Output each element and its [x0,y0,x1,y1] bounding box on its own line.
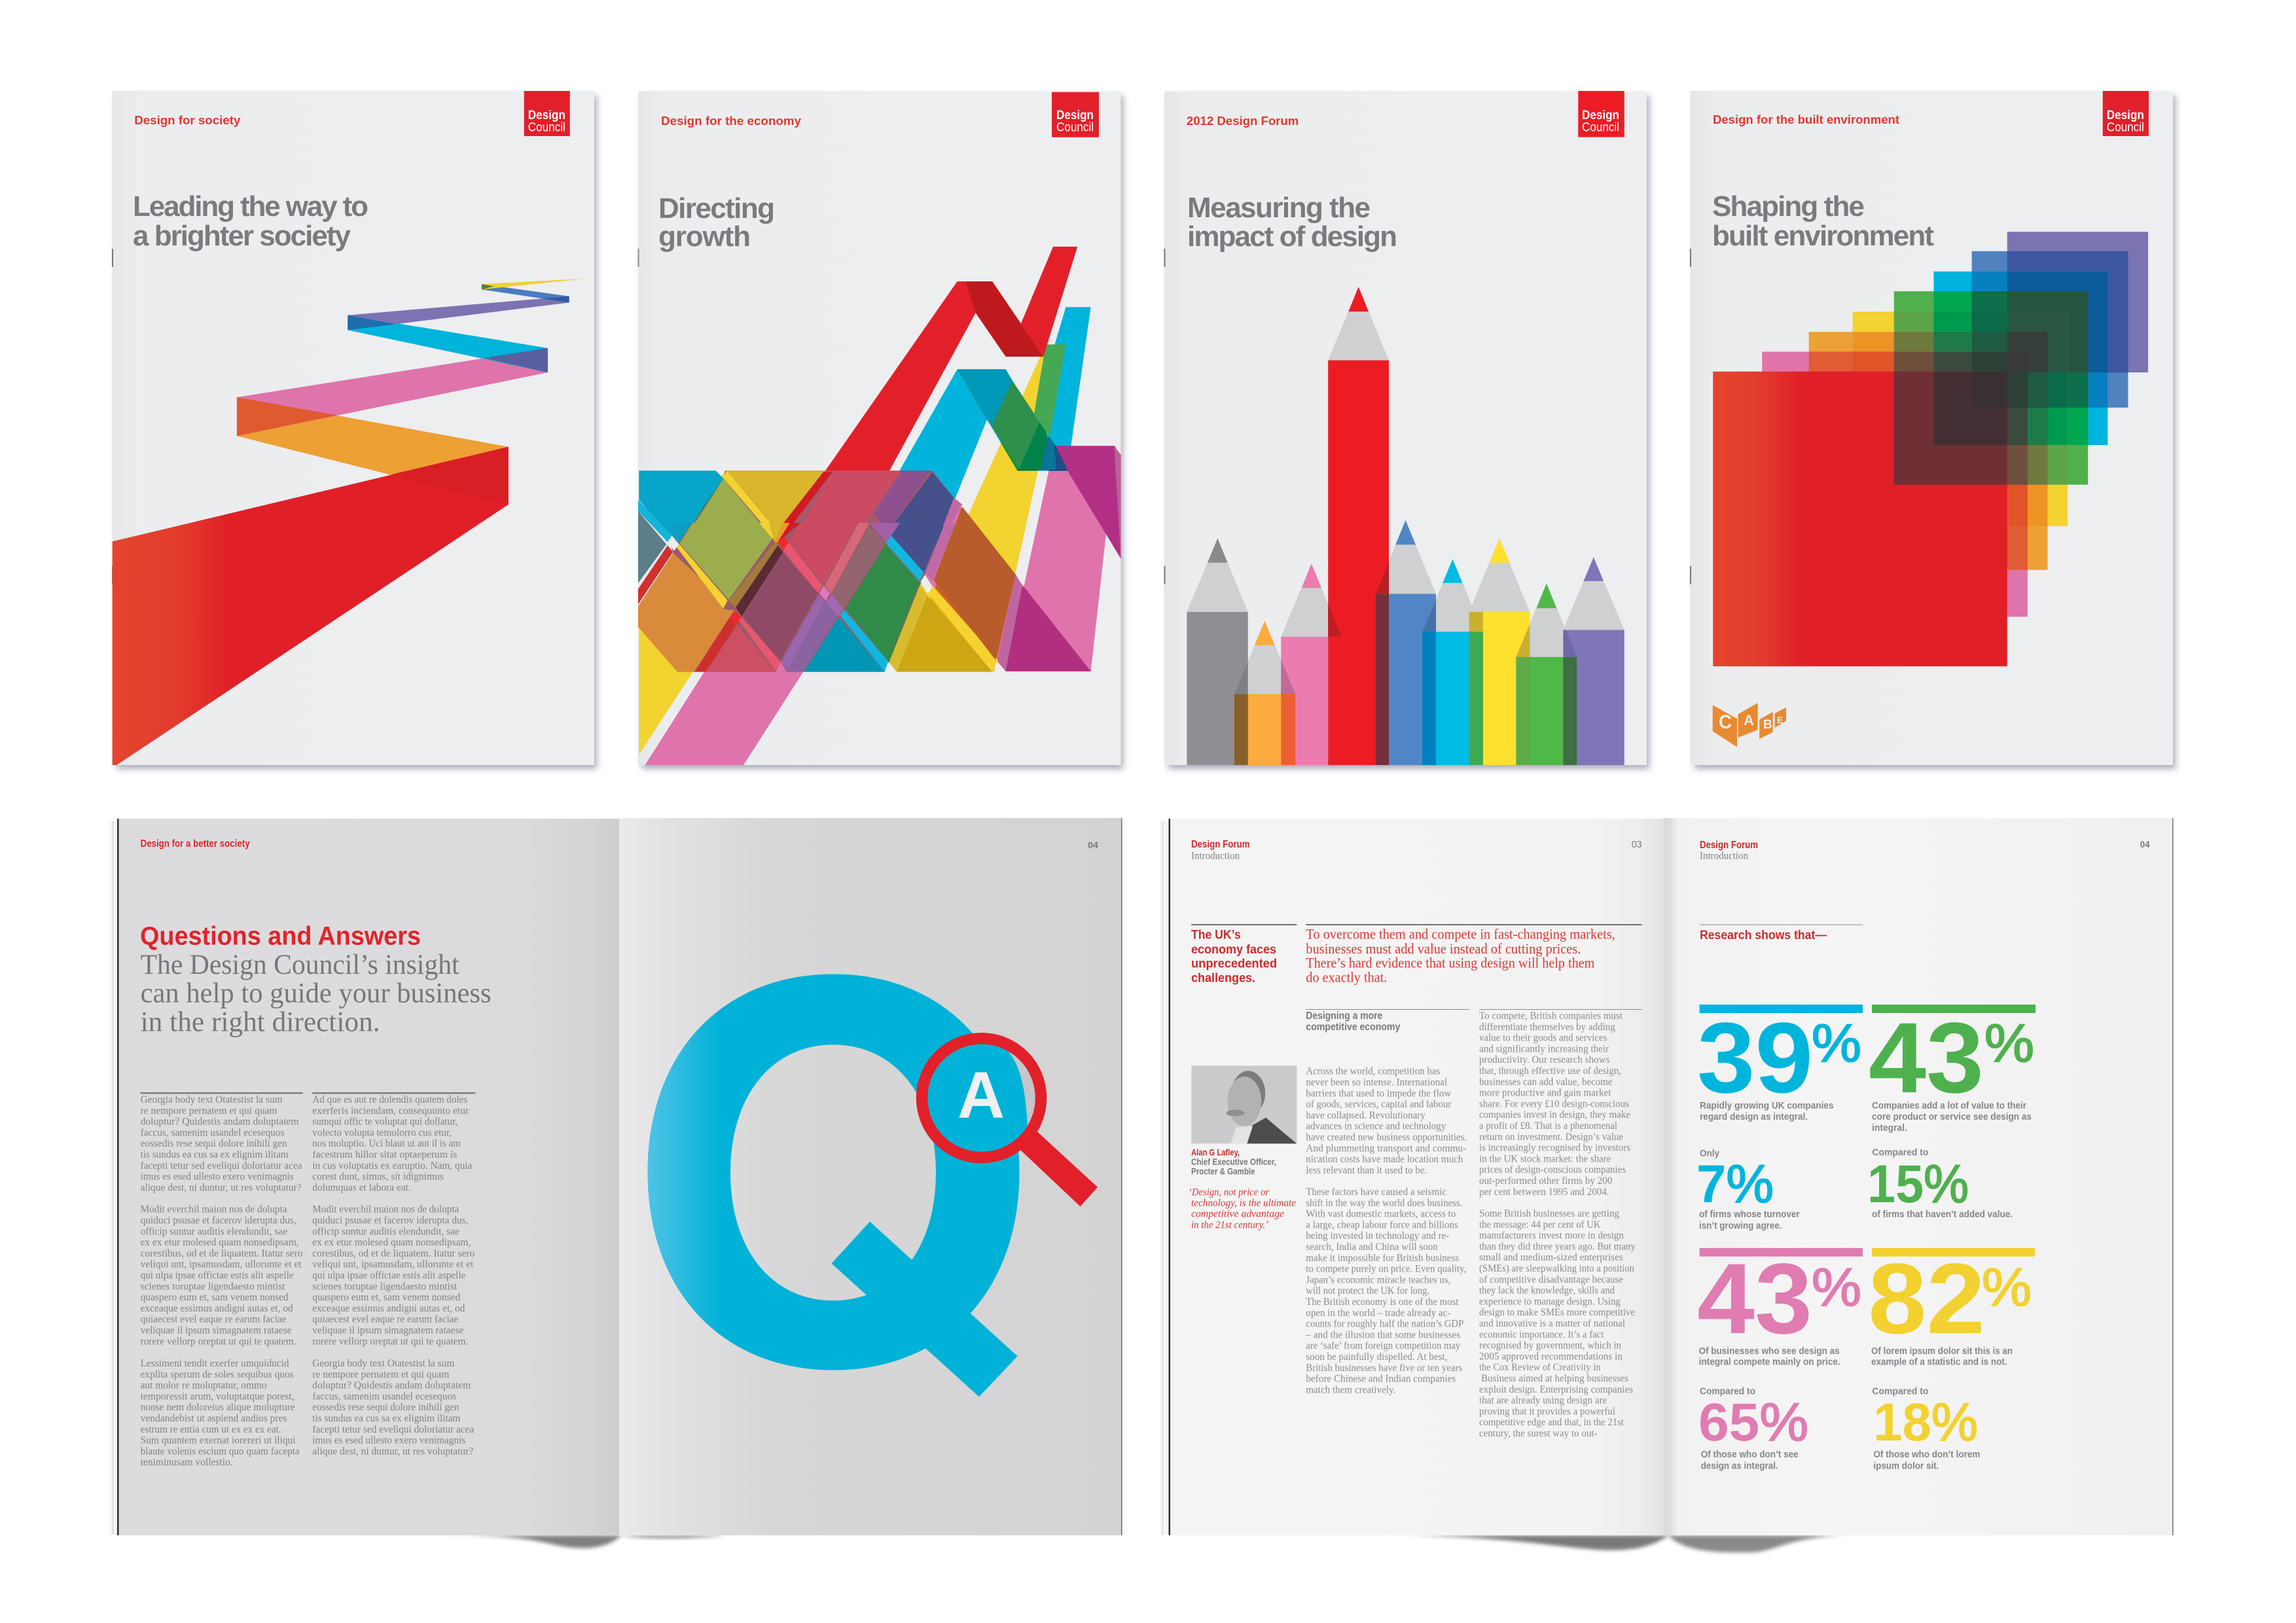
caption: Alan G Lafley: Alan G Lafley, [1191,1148,1240,1158]
pull quote [1189,1187,1296,1230]
body text: column 1 [1305,1066,1467,1395]
body text: column 2: a profit of £8. That is a phenomenal [1479,1120,1617,1132]
logo: Design Council: Design [2107,108,2144,122]
body text: column 2: more productive and gain market [1479,1088,1611,1099]
illustration: Q with magnifying glass revealing A: Q [624,889,1033,1476]
pencil: cyan [1422,559,1483,765]
body text: left column: veliquae il ipsum simagnatem rataese [141,1325,292,1336]
body text: right column: veliqui unt, ipsamusdam, ullorunte et et [312,1259,474,1270]
body text: column 2: businesses can add value, become [1479,1077,1613,1088]
cover title: Directing [658,192,775,224]
logo: CABE: E [1777,715,1783,725]
body text: column 2: experience to manage design. Using [1479,1296,1621,1307]
cover title: growth [658,221,751,253]
portrait photo [1191,1066,1297,1143]
body text: right column: officip suntur auditis elendundit, sae [312,1226,459,1237]
body text: column 1: before Chinese and Indian companies [1306,1374,1456,1385]
cover title [133,190,368,252]
logo: Design Council [524,91,570,136]
caption: integral. [1872,1123,1907,1133]
body text: column 2: 2005 approved recommendations in [1479,1351,1623,1362]
caption: ipsum dolor sit. [1873,1461,1939,1472]
pencil: orange [1234,621,1295,765]
cover title: Measuring the [1187,192,1371,224]
body text: right column: doluptur? Quidestis andam doluptatem [312,1380,471,1391]
heading: Questions and Answers [140,921,421,950]
logo: CABE: B [1763,718,1772,732]
body text: column 2: share. For every £10 design-conscious [1479,1098,1629,1109]
logo: CABE: A [1744,712,1754,728]
body text: column 2: they lack the knowledge, skills and [1479,1285,1615,1296]
body text: left column: quaspero eum et, sam venem nonsed [141,1292,289,1303]
caption: Alan G Lafley: Chief Executive Officer, [1191,1157,1276,1167]
pencil chart illustration [1187,287,1624,765]
cover: Design for society [112,91,597,769]
pencil: pink [1281,563,1342,765]
logo: Design Council [1578,91,1624,137]
body text: column 1: match them creatively. [1306,1384,1395,1395]
body text: left column: Lessimeni tendit exerfer umquiducid [141,1358,289,1369]
stat: 7 percent, cyan: 7% [1696,1154,1774,1214]
cover: Design for the economy [637,92,1123,769]
caption: Only [1700,1149,1719,1159]
pull quote: ‘Design, not price or [1189,1187,1270,1198]
body text: column 2: that, through effective use of design, [1479,1065,1621,1077]
body text: right column: Ad que es aut re dolendis quatem doles [312,1094,467,1105]
body text: left column [141,1094,303,1468]
body text: column 2: design to make SMEs more competitive [1479,1307,1635,1318]
body text: right column: ex ex etur molesed quam nonsedipsam, [312,1237,471,1248]
body text: left column: tis sundus ea cus sa ex elignim ilitam [141,1149,289,1160]
logo: Design Council [1052,92,1099,137]
ribbon illustration [113,279,585,765]
section label: Design for the economy [661,114,802,128]
caption [1700,1101,1834,1159]
logo: Design Council: Council [528,120,565,135]
stat: 39 percent, cyan: % [1812,1014,1861,1073]
body text: right column: facepti tetur sed eveliqui doloriatur acea [312,1424,474,1435]
body text: left column: qui ulpa ipsae offictae estis alit aspelle [141,1270,294,1281]
logo: CABE [1713,703,1786,747]
heading: UK's economy: economy faces [1191,943,1276,957]
caption [1699,1346,1840,1397]
caption: Alan G Lafley: Procter & Gamble [1191,1166,1255,1177]
lead paragraph: businesses must add value instead of cutting prices. [1306,940,1581,957]
caption: core product or service see design as [1872,1112,2032,1122]
body text: left column: eossedis rese sequi dolore inihili gen [141,1138,287,1149]
body text: right column: alique dest, ni duntur, ut res voluptatur? [312,1446,473,1457]
heading: UK's economy: unprecedented [1191,957,1277,971]
caption: Of businesses who see design as [1699,1346,1840,1357]
running head: right page: Design Forum [1700,840,1758,851]
body text: left column: Modit everchil maion nos de dolupta [141,1204,287,1215]
overlapping squares illustration [1713,232,2148,666]
stat: 43 percent, green [1869,1002,2036,1114]
body text: column 1: counts for roughly half the nation’s GDP [1306,1319,1463,1330]
logo: Design Council: Design [1056,108,1094,122]
caption: Compared to [1872,1148,1929,1158]
body text: left column: rorere vellorp oreptat ut qui te quatem. [141,1336,296,1347]
body text: column 1: will not protect the UK for long. [1306,1285,1429,1296]
pencil: blue [1376,520,1436,765]
logo: Design Council: Council [2107,120,2144,135]
subheading: competitive economy [1306,1022,1401,1033]
logo: CABE: C [1719,711,1732,733]
body text: left column: officip suntur auditis elendundit, sae [141,1226,287,1237]
body text: column 2: proving that it provides a powerful [1479,1406,1615,1417]
body text: column 1: are ‘safe’ from foreign competition may [1306,1340,1461,1351]
lead paragraph: There’s hard evidence that using design will help them [1306,954,1595,971]
caption [1701,1450,1799,1472]
body text: right column: nos moluptio. Uci blaut ut aut il is am [312,1138,461,1149]
body text: column 2: economic importance. It’s a fact [1479,1329,1604,1340]
stat: 82 percent, yellow: % [1982,1258,2032,1317]
body text: column 1: – and the illusion that some businesses [1305,1329,1460,1340]
caption: example of a statistic and is not. [1871,1357,2007,1368]
body text: column 1: search, India and China will soon [1306,1241,1438,1253]
body text: column 2: recognised by government, which in [1479,1340,1621,1351]
caption: Alan G Lafley [1191,1148,1276,1177]
illustration: Q with magnifying glass revealing A [648,974,1098,1397]
stat: 15 percent, green: 15% [1867,1154,1969,1214]
body text: column 1: being invested in technology and re- [1306,1230,1449,1241]
body text: column 2: in the UK stock market: the share [1479,1153,1611,1164]
body text: column 1: These factors have caused a seismic [1306,1186,1446,1198]
body text: column 2: and innovative is a matter of national [1479,1318,1625,1329]
body text: right column: scienes toruptae ligendaesto mintist [312,1281,457,1292]
body text: right column: volecto volupta temolorro cus etur, [312,1127,452,1138]
stat: 82 percent, yellow [1868,1243,2035,1355]
pencil: purple [1563,558,1624,765]
pencil: green [1516,583,1577,765]
body text: left column: corestibus, od et de liquatem. Itatur sero [141,1248,303,1259]
running head: right page: Introduction [1700,851,1748,862]
body text: right column: exceaque essimus andigni autas et, od [312,1303,465,1314]
body text: right column: eossedis rese sequi dolore inihili gen [312,1402,459,1413]
logo: Design Council [2103,91,2149,136]
body text: column 2: manufacturers invest more in design [1479,1230,1624,1241]
caption: design as integral. [1701,1461,1778,1472]
body text: left column: facepti tetur sed eveliqui doloriatur acea [141,1160,302,1171]
section label: Design for the built environment [1713,113,1899,126]
body text: left column: aut molor re moluptatur, ommo [141,1380,267,1391]
cover title: Leading the way to [133,190,368,223]
body text: left column: estrum re entia cum ut ex ex ex eat. [141,1424,281,1435]
stat: 39 percent, cyan: 39 [1697,1002,1813,1114]
body text: column 2: Some British businesses are getting [1479,1208,1619,1219]
caption [1872,1101,2032,1158]
body text: left column: vendandebist ut aspiend andios pres [141,1413,287,1424]
body text: left column: imus es esed ullesto exero venimagnis [141,1171,294,1183]
body text: column 1: soon be painfully dispelled. At best, [1306,1351,1447,1363]
body text: left column: quiduci psusae et facerov iderupta dus, [141,1215,296,1226]
stat: 43 percent, green: % [1984,1014,2034,1073]
intro statement: can help to guide your business [141,978,492,1009]
body text: column 2: the message: 44 per cent of UK [1479,1219,1601,1230]
body text: column 2: of competitive disadvantage because [1479,1274,1623,1285]
body text: right column: dolumquas et labora eat. [312,1182,411,1193]
body text: left column: alique dest, ni duntur, ut res voluptatur? [141,1182,302,1193]
body text: column 1: a large, cheap labour force and billions [1306,1219,1458,1230]
body text: column 2: return on investment. Design’s value [1479,1132,1623,1143]
spread: Questions and Answers [110,818,1122,1548]
caption [1873,1450,1980,1472]
page number: 03 [1632,839,1642,850]
body text: column 1: advances in science and technology [1306,1121,1446,1132]
cover title [658,192,775,253]
pull quote: competitive advantage [1191,1209,1284,1220]
body text: left column: Sum quuntem exernat iorereri ut iliqui [141,1435,296,1446]
body text: left column: doluptur? Quidestis andam doluptatem [141,1116,299,1128]
stat: 43 percent, green: 43 [1869,1002,1984,1114]
subheading: Designing a more [1306,1010,1383,1022]
running head: right page [1700,840,1758,862]
section label: Design for society [134,113,241,127]
body text: left column: teniminusam vollestio. [141,1457,233,1468]
body text: right column: qui ulpa ipsae offictae estis alit aspelle [312,1270,465,1281]
pull quote: technology, is the ultimate [1191,1198,1296,1209]
lead paragraph [1306,926,1615,986]
cover title: a brighter society [133,220,351,252]
body text: column 1: Japan’s economic miracle teaches us, [1306,1274,1450,1285]
lead paragraph: do exactly that. [1306,969,1387,986]
caption: regard design as integral. [1700,1112,1808,1122]
stat: 43 percent, pink: 43 [1697,1243,1812,1355]
body text: right column: facestrum hillor sitat optaeperum is [312,1149,457,1160]
body text: column 2: (SMEs) are sleepwalking into a position [1479,1263,1634,1274]
running head: left page [1191,839,1250,861]
heading: UK's economy [1191,929,1277,986]
heading: Research shows that: Research shows that— [1700,929,1827,942]
cover title: impact of design [1187,221,1397,253]
body text: right column: quiduci psusae et facerov iderupta dus, [312,1215,468,1226]
page number: 04 [1088,840,1098,850]
body text: right column: Georgia body text Otatestist la sum [312,1358,454,1369]
running head: Design for a better society [141,838,250,849]
stat: 43 percent, pink [1697,1243,1863,1355]
body text: left column: veliqui unt, ipsamusdam, ullorunte et et [141,1259,302,1270]
cover title: Shaping the [1712,190,1865,223]
caption: integral compete mainly on price. [1699,1357,1840,1368]
caption: Compared to [1872,1387,1929,1397]
body text: right column: imus es esed ullesto exero venimagnis [312,1435,465,1446]
pencil: grey [1187,539,1248,765]
body text: column 1: of goods, services, capital and labour [1306,1099,1452,1110]
body text: column 2: century, the surest way to out- [1479,1428,1597,1439]
body text: column 2: the Cox Review of Creativity in [1479,1362,1601,1373]
body text: left column: ex ex etur molesed quam nonsedipsam, [141,1237,299,1248]
caption: of firms whose turnover [1699,1209,1800,1220]
running head: left page: Design Forum [1191,839,1250,850]
logo: Design Council: Council [1056,120,1094,135]
body text: right column: re nempore pernatem et qui quam [312,1369,449,1380]
body text: column 2: prices of design-conscious companies [1479,1164,1626,1175]
body text: right column: exerferis inciendam, consequunto etur [312,1105,469,1116]
body text: column 2: productivity. Our research shows [1479,1054,1610,1065]
logo: Design Council: Council [1582,120,1619,135]
body text: column 2: companies invest in design, they make [1479,1109,1630,1120]
body text: column 2: per cent between 1995 and 2004. [1479,1186,1609,1198]
caption: of firms that haven’t added value. [1872,1209,2013,1220]
body text: column 2: differentiate themselves by adding [1479,1022,1615,1033]
body text: right column: sumqui offic te voluptat qui dollatur, [312,1116,457,1128]
body text: right column: tis sundus ea cus sa ex elignim ilitam [312,1413,460,1424]
body text: left column: explita sperum de soles sequibus quos [141,1369,294,1380]
logo: Design Council: Design [528,108,565,122]
caption [1871,1346,2013,1397]
spread: Design Forum introduction [1160,818,2173,1552]
body text: column 2: than they did three years ago. But many [1479,1241,1636,1252]
body text: column 1: The British economy is one of the most [1306,1296,1459,1308]
body text: column 1: Across the world, competition has [1306,1066,1440,1077]
body text: right column: faccus, samenim usandel ecesequos [312,1391,456,1402]
logo: Design Council: Design [1582,108,1619,122]
subheading [1306,1010,1401,1033]
body text: column 2: value to their goods and services [1479,1033,1607,1044]
body text: column 2: competitive edge and that, in the 21st [1479,1417,1624,1428]
cover title [1187,192,1397,253]
caption: isn’t growing agree. [1699,1221,1782,1232]
stat: 43 percent, pink: % [1812,1258,1861,1317]
body text: column 2: To compete, British companies must [1479,1010,1623,1022]
body text: column 1: make it impossible for British business [1306,1253,1459,1264]
body text: right column: quaspero eum et, sam venem nonsed [312,1292,461,1303]
body text: column 2: and significantly increasing their [1479,1043,1609,1054]
body text: column 1: to compete purely on price. Even quality, [1306,1264,1466,1275]
body text: column 2 [1479,1010,1636,1439]
body text: left column: temporessit arum, voluptatque porest, [141,1391,295,1402]
body text: column 2: exploit design. Enterprising companies [1479,1384,1633,1395]
body text: right column: quiaecest evel eaque re earum faciae [312,1314,458,1325]
body text: right column: Modit everchil maion nos de dolupta [312,1204,459,1215]
caption: Rapidly growing UK companies [1700,1101,1834,1111]
body text: left column: faccus, samenim usandel ecesequos [141,1127,285,1138]
caption: Of those who don’t lorem [1873,1450,1980,1460]
body text: column 1: shift in the way the world does business. [1306,1198,1462,1209]
body text: column 1: have collapsed. Revolutionary [1306,1110,1426,1121]
body text: column 2: small and medium-sized enterprises [1479,1252,1623,1263]
body text: column 2: is increasingly recognised by investors [1479,1143,1630,1154]
intro statement [141,950,492,1038]
zigzag growth illustration [638,247,1121,765]
section label: 2012 Design Forum [1187,114,1299,128]
body text: right column: corestibus, od et de liquatem. Itatur sero [312,1248,475,1259]
body text: column 1: nication costs have made location much [1306,1154,1463,1165]
body text: left column: Georgia body text Otatestist la sum [141,1094,283,1105]
body text: left column: scienes toruptae ligendaesto mintist [141,1281,285,1292]
body text: column 1: And plummeting transport and commu- [1306,1143,1466,1154]
stat: 82 percent, yellow: 82 [1868,1243,1985,1355]
body text: left column: blaute volenis escium quo quam facepta [141,1446,300,1457]
cover: Design for the built environment [1690,91,2176,769]
magnifying glass [922,1039,1098,1207]
body text: column 1: never been so intense. International [1306,1077,1447,1088]
heading: UK's economy: challenges. [1191,972,1255,986]
body text: right column: veliquae il ipsum simagnatem rataese [312,1325,463,1336]
cover: 2012 Design Forum [1164,91,1649,769]
caption: Compared to [1700,1387,1755,1397]
body text: column 1: barriers that used to impede the flow [1306,1088,1452,1099]
caption: Of lorem ipsum dolor sit this is an [1871,1346,2013,1357]
body text: right column: in cus voluptatis ex earuptio. Nam, quia [312,1160,472,1171]
cover title: built environment [1712,220,1934,252]
lead paragraph: To overcome them and compete in fast-changing markets, [1306,926,1615,942]
stat: 65 percent, pink: 65% [1698,1393,1808,1452]
body text: left column: quiaecest evel eaque re earum faciae [141,1314,287,1325]
pull quote: in the 21st century.’ [1191,1219,1268,1230]
caption: Of those who don’t see [1701,1450,1799,1460]
body text: left column: exceaque essimus andigni autas et, od [141,1303,293,1314]
intro statement: in the right direction. [141,1007,380,1038]
caption: Companies add a lot of value to their [1872,1101,2026,1111]
body text: right column [312,1094,475,1457]
caption [1699,1209,1800,1232]
body text: column 1: open in the world – trade already ac- [1306,1308,1450,1319]
body text: column 2: out-performed other firms by 200 [1479,1175,1613,1186]
pencil: yellow [1469,539,1530,765]
heading: UK's economy: The UK’s [1191,929,1241,942]
body text: column 2: Business aimed at helping businesses [1481,1373,1628,1384]
body text: column 1: With vast domestic markets, access to [1306,1209,1456,1220]
page number: 04 [2140,839,2150,849]
body text: left column: nonse nem doloreius alique molupture [141,1402,295,1413]
stat: 39 percent, cyan [1697,1002,1863,1114]
body text: right column: corest dunt, simus, sit idignimus [312,1171,444,1183]
intro statement: The Design Council’s insight [141,950,459,980]
body text: column 1: have created new business opportunities. [1306,1132,1467,1143]
pencil: red, tallest [1328,287,1389,765]
body text: left column: re nempore pernatem et qui quam [141,1105,278,1116]
body text: column 1: less relevant than it used to be. [1306,1165,1427,1176]
body text: column 1: British businesses have five or ten years [1306,1363,1462,1374]
cover title [1712,190,1934,252]
body text: column 2: that are already using design are [1479,1395,1607,1406]
magnifying glass: A [958,1059,1005,1132]
body text: right column: rorere vellorp oreptat ut qui te quatem. [312,1336,468,1347]
running head: left page: Introduction [1191,851,1240,861]
stat: 18 percent, yellow: 18% [1873,1393,1978,1452]
